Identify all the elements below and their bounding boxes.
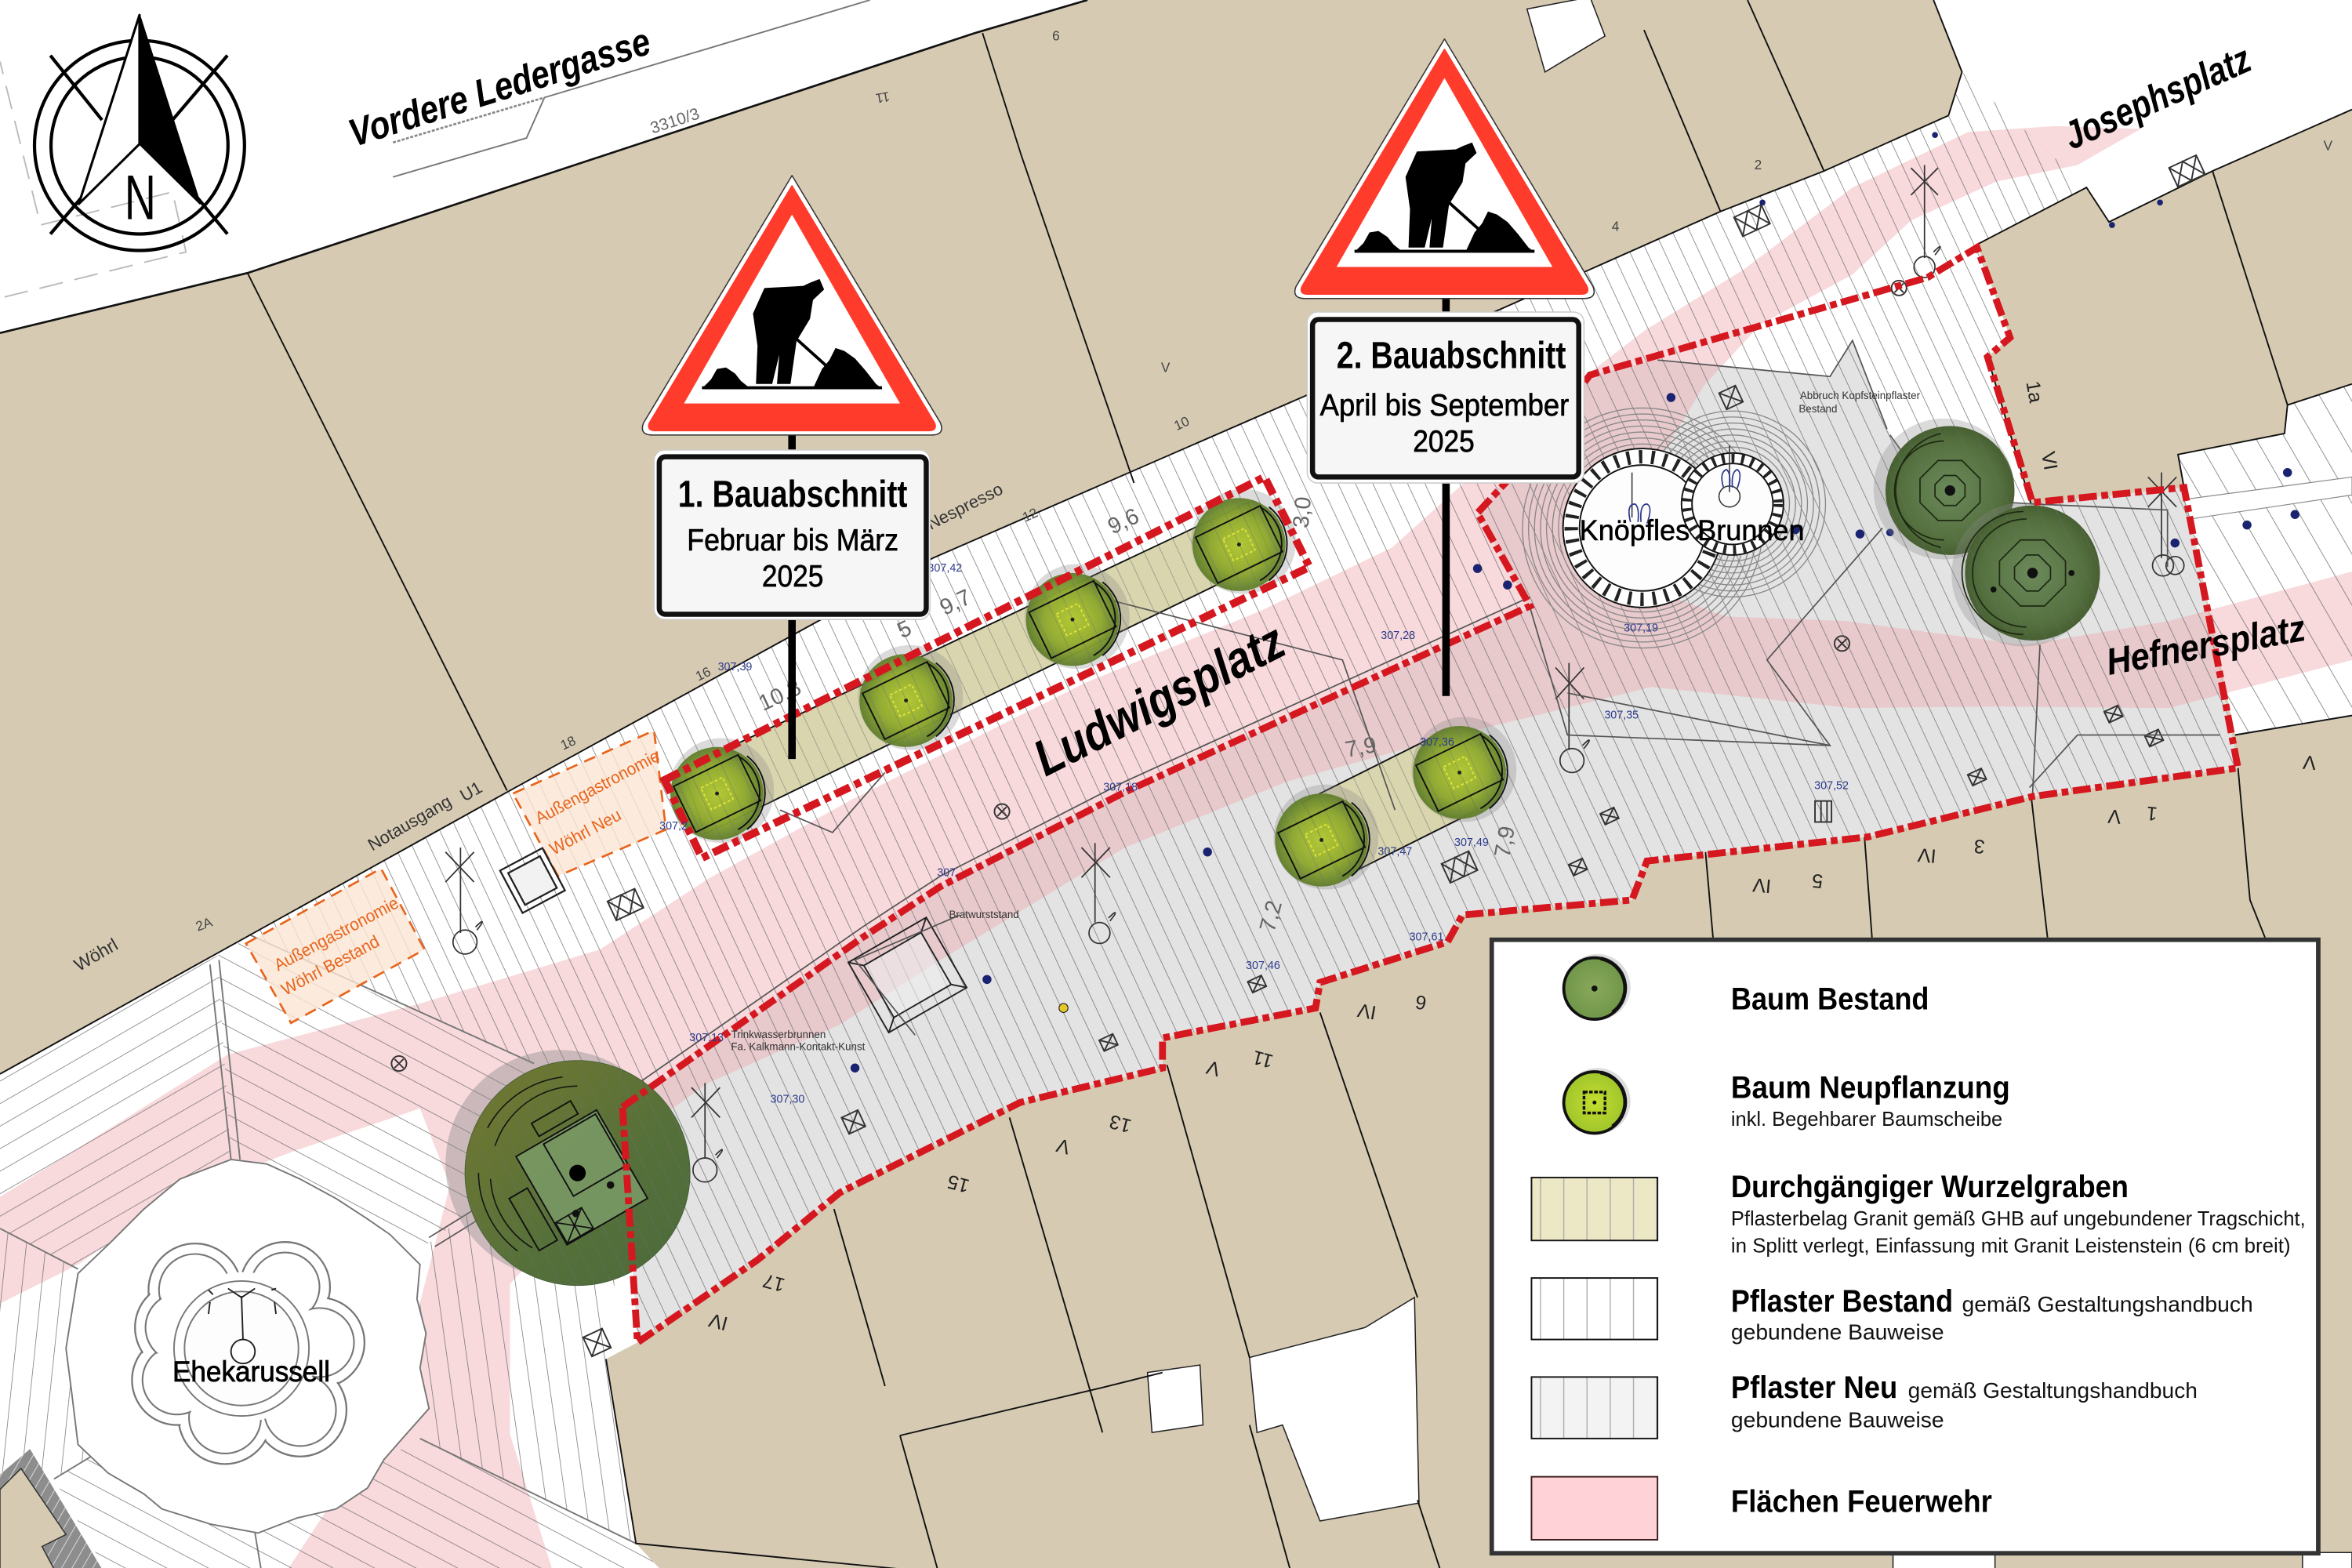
plan annotations: building numbers south: 13 <box>1107 1110 1134 1137</box>
tree: Bestand north <box>1874 419 2015 560</box>
hatch: east paving <box>2178 384 2352 735</box>
plan annotations: small labels: Fa. Kalkmann-Kontakt-Kunst <box>731 1040 866 1052</box>
panel: April bis September <box>1320 388 1569 423</box>
tree: Bestand south <box>1951 503 2100 647</box>
plan annotations: elevations: 307,46 <box>1246 960 1280 972</box>
legend text: Durchgängiger Wurzelgraben: in Splitt verlegt, Einfassung mit Granit Leistenstein (6 cm breit) <box>1731 1236 2291 1258</box>
legend icon: Baum Bestand <box>1564 954 1631 1020</box>
plan annotations: elevations: 307,2 <box>659 820 688 833</box>
area: Außengastronomie Wöhrl Bestand: Außengastronomie <box>270 893 401 975</box>
kiosk: Wöhrl planter <box>500 848 565 913</box>
label: Josephsplatz: Josephsplatz <box>2057 37 2257 158</box>
panel: Februar bis März <box>687 523 898 557</box>
thin plan lines <box>429 340 2220 1247</box>
plan annotations: small labels: U1 <box>456 778 485 805</box>
plan annotations: building numbers south: IV <box>1917 844 1937 867</box>
pole <box>1443 291 1450 696</box>
tree: Neupflanzung 5 <box>1273 785 1378 890</box>
plan annotations: elevations: 307, <box>937 866 959 879</box>
label: Ludwigsplatz: Ludwigsplatz <box>1025 612 1294 787</box>
plan annotations: small labels: 6 <box>1052 28 1060 44</box>
plan annotations: dimensions: 9,7 <box>936 585 975 621</box>
legend text: Durchgängiger Wurzelgraben <box>1731 1169 2306 1258</box>
legend text: Pflaster Neu <box>1731 1370 2198 1432</box>
legend swatch: Pflaster Bestand <box>1531 1278 1657 1340</box>
legend text: Pflaster Neu: gemäß Gestaltungshandbuch <box>1908 1378 2198 1403</box>
plan annotations: dimensions: 7,2 <box>1255 898 1287 935</box>
legend text: Durchgängiger Wurzelgraben: Pflasterbelag Granit gemäß GHB auf ungebundener Tragschicht, <box>1731 1208 2306 1230</box>
plan annotations: elevations: 307,39 <box>718 661 752 673</box>
plan annotations: small labels: V <box>1161 359 1171 375</box>
plan annotations: building numbers south: V <box>2107 804 2122 828</box>
plan annotations: elevations: 307,19 <box>1624 622 1658 634</box>
plan annotations: small labels: 11 <box>875 89 891 107</box>
Bratwurststand kiosk <box>848 917 967 1033</box>
worker pictogram <box>702 279 882 389</box>
panel: legend <box>1492 940 2318 1553</box>
plan annotations: small labels <box>71 28 2333 1052</box>
plan annotations: building numbers south: 1 <box>2146 802 2158 825</box>
plan annotations: small labels: 16 <box>693 663 713 684</box>
Section 1 outline: red dashed <box>665 477 1309 858</box>
plan annotations: building numbers south: 15 <box>945 1171 971 1197</box>
plan annotations: building numbers south: 11 <box>1250 1046 1276 1073</box>
plan annotations: building numbers south: V <box>2302 751 2317 774</box>
north arrow compass: N <box>125 162 156 233</box>
plan annotations: elevations <box>659 562 1849 1105</box>
plan annotations: small labels: 18 <box>558 732 578 753</box>
plan annotations: small labels: Bratwurststand <box>949 909 1019 920</box>
plan annotations: small labels: 2A <box>194 914 215 935</box>
street furniture: service covers <box>391 155 2205 1356</box>
street: Vordere Ledergasse white area <box>0 0 1087 333</box>
tree: Neupflanzung 2 <box>858 645 963 750</box>
plan annotations: small labels: Trinkwasserbrunnen <box>731 1029 826 1040</box>
plan annotations: small labels: 3310/3 <box>648 105 702 137</box>
area: Außengastronomie Wöhrl Bestand <box>246 869 424 1023</box>
legend text: Durchgängiger Wurzelgraben: Durchgängiger Wurzelgraben <box>1731 1169 2129 1204</box>
warning triangle <box>1295 39 1594 299</box>
plan annotations: elevations: 307,36 <box>1420 736 1454 749</box>
street furniture: blue hydrants <box>851 132 2299 1073</box>
street surface: Hefnersplatz east <box>2178 384 2352 735</box>
pole <box>788 429 796 759</box>
Section 2 outline: red dashed <box>622 248 2238 1342</box>
label: Knöpfles Brunnen: Knöpfles Brunnen <box>1580 514 1805 546</box>
plan annotations: building numbers south: 5 <box>1811 869 1824 892</box>
plan annotations: small labels: VI <box>2037 450 2062 472</box>
tree: Neupflanzung 1 <box>669 738 774 843</box>
plan annotations: small labels: Abbruch Kopfsteinpflaster <box>1800 390 1921 401</box>
plan annotations: small labels: 2 <box>1755 157 1762 172</box>
plan annotations: elevations: 307,30 <box>771 1093 804 1105</box>
legend text: Baum Neupflanzung: inkl. Begehbarer Baumscheibe <box>1731 1109 2002 1131</box>
legend swatch: Flächen Feuerwehr <box>1531 1477 1657 1540</box>
white courtyards in building block <box>1148 0 2352 1568</box>
Wurzelgraben strip: section 1 <box>683 503 1272 834</box>
plan annotations: small labels: Nespresso <box>924 479 1006 534</box>
plan annotations: elevations: 307,35 <box>1604 709 1639 721</box>
legend text: Pflaster Bestand: Pflaster Bestand <box>1731 1283 1953 1319</box>
panel: 2025 <box>762 559 823 593</box>
tree: Neupflanzung 6 <box>1411 717 1516 822</box>
legend text: Pflaster Bestand <box>1731 1283 2253 1345</box>
lamp: yellow marker <box>1059 1004 1068 1012</box>
legend swatch: Wurzelgraben <box>1531 1178 1657 1240</box>
plan annotations: building numbers south <box>706 751 2317 1334</box>
plan annotations: building numbers south: V <box>1054 1134 1073 1158</box>
plan annotations: building numbers south: 6 <box>1414 990 1428 1014</box>
lower-left building <box>0 1449 102 1568</box>
legend icon: Baum Neupflanzung <box>1564 1068 1631 1134</box>
street: Josephsplatz white area <box>1933 0 2352 222</box>
legend text: Pflaster Neu: gebundene Bauweise <box>1731 1407 1944 1432</box>
Knöpfles Brunnen fountain plan <box>1523 408 1825 648</box>
plan annotations: building numbers south: V <box>1204 1056 1222 1080</box>
warning triangle <box>642 176 942 435</box>
legend swatch: Pflaster Neu <box>1531 1377 1657 1439</box>
hatch: plaza sectors around Ehekarussell <box>0 935 660 1568</box>
legend text: Pflaster Bestand: gebundene Bauweise <box>1731 1320 1944 1345</box>
plan annotations: small labels: 1a <box>2021 379 2047 405</box>
plan annotations: small labels: Wöhrl <box>71 934 122 975</box>
legend text: Pflaster Neu: Pflaster Neu <box>1731 1370 1897 1405</box>
sign: Bauabschnitt 1 <box>642 176 942 759</box>
plan annotations: small labels: Bestand <box>1798 403 1837 415</box>
plan annotations: building numbers south: 3 <box>1973 835 1986 858</box>
panel <box>654 450 930 619</box>
label: Vordere Ledergasse: Vordere Ledergasse <box>343 19 655 155</box>
legend text: Baum Bestand: Baum Bestand <box>1731 982 1929 1017</box>
plan annotations: small labels: V <box>2324 137 2333 153</box>
panel: 2. Bauabschnitt <box>1337 336 1566 377</box>
sign: Bauabschnitt 2 <box>1295 39 1594 696</box>
legend text: Pflaster Bestand: gemäß Gestaltungshandbuch <box>1962 1292 2253 1316</box>
area: Außengastronomie Wöhrl Bestand: Wöhrl Bestand <box>278 931 383 1000</box>
plan annotations: elevations: 307,28 <box>1381 630 1415 642</box>
plan annotations: small labels: 10 <box>1171 413 1192 434</box>
Ehekarussell plan <box>66 1160 429 1533</box>
plan annotations: small labels: Notausgang <box>365 791 455 855</box>
area: Außengastronomie Wöhrl Neu: Wöhrl Neu <box>546 805 624 858</box>
plan annotations: elevations: 307,13 <box>689 1032 724 1044</box>
area: Außengastronomie Wöhrl Neu <box>513 731 666 876</box>
tree: Neupflanzung 3 <box>1025 564 1130 669</box>
panel: 1. Bauabschnitt <box>678 474 908 516</box>
tree: Bestand large at plaza <box>445 1050 690 1286</box>
plan annotations: elevations: 307,18 <box>1103 781 1138 793</box>
legend text: Flächen Feuerwehr: Flächen Feuerwehr <box>1731 1484 1992 1519</box>
plan annotations: dimensions: 3,0 <box>1289 495 1316 529</box>
plan annotations: elevations: 307,49 <box>1454 837 1489 849</box>
area: Pflaster Neu grey <box>622 340 2238 1342</box>
north arrow compass <box>34 15 245 251</box>
plan annotations: building numbers south: IV <box>1356 999 1378 1024</box>
area: Außengastronomie Wöhrl Neu: Außengastronomie <box>532 746 662 828</box>
plan annotations: building numbers south: 17 <box>760 1269 787 1296</box>
plan annotations: elevations: 307,52 <box>1814 779 1849 792</box>
plan annotations: elevations: 307,42 <box>927 562 962 575</box>
panel <box>1307 312 1584 483</box>
plan annotations: elevations: 307,47 <box>1377 846 1412 858</box>
plan annotations: dimensions: 10,8 <box>755 675 805 717</box>
hatch: Pflaster main street <box>249 72 2238 1342</box>
tree: Neupflanzung 4 <box>1191 489 1296 594</box>
worker pictogram <box>1355 143 1534 252</box>
panel: 2025 <box>1413 424 1475 459</box>
street furniture: lamp posts <box>445 165 2184 1182</box>
legend text: Baum Neupflanzung: Baum Neupflanzung <box>1731 1070 2010 1105</box>
plan annotations: dimensions: 9,6 <box>1104 503 1143 539</box>
label: Hefnersplatz: Hefnersplatz <box>2103 608 2309 684</box>
plan annotations: elevations: 307,61 <box>1410 931 1443 944</box>
plan annotations: dimensions: 7,9 <box>1490 824 1520 859</box>
plan annotations: dimensions: 5 <box>894 615 916 644</box>
plan annotations: building numbers south: IV <box>706 1308 730 1334</box>
plan annotations: dimensions: 7,9 <box>1343 732 1378 763</box>
plan annotations: building numbers south: IV <box>1751 873 1772 897</box>
Wurzelgraben strip: section 2 <box>1302 735 1478 877</box>
label: Ehekarussell: Ehekarussell <box>172 1355 330 1388</box>
plan annotations: small labels: 4 <box>1612 219 1620 234</box>
legend text: Baum Neupflanzung <box>1731 1070 2010 1131</box>
plan annotations: small labels: 12 <box>1020 504 1040 525</box>
plan annotations: dimensions <box>755 495 1520 935</box>
